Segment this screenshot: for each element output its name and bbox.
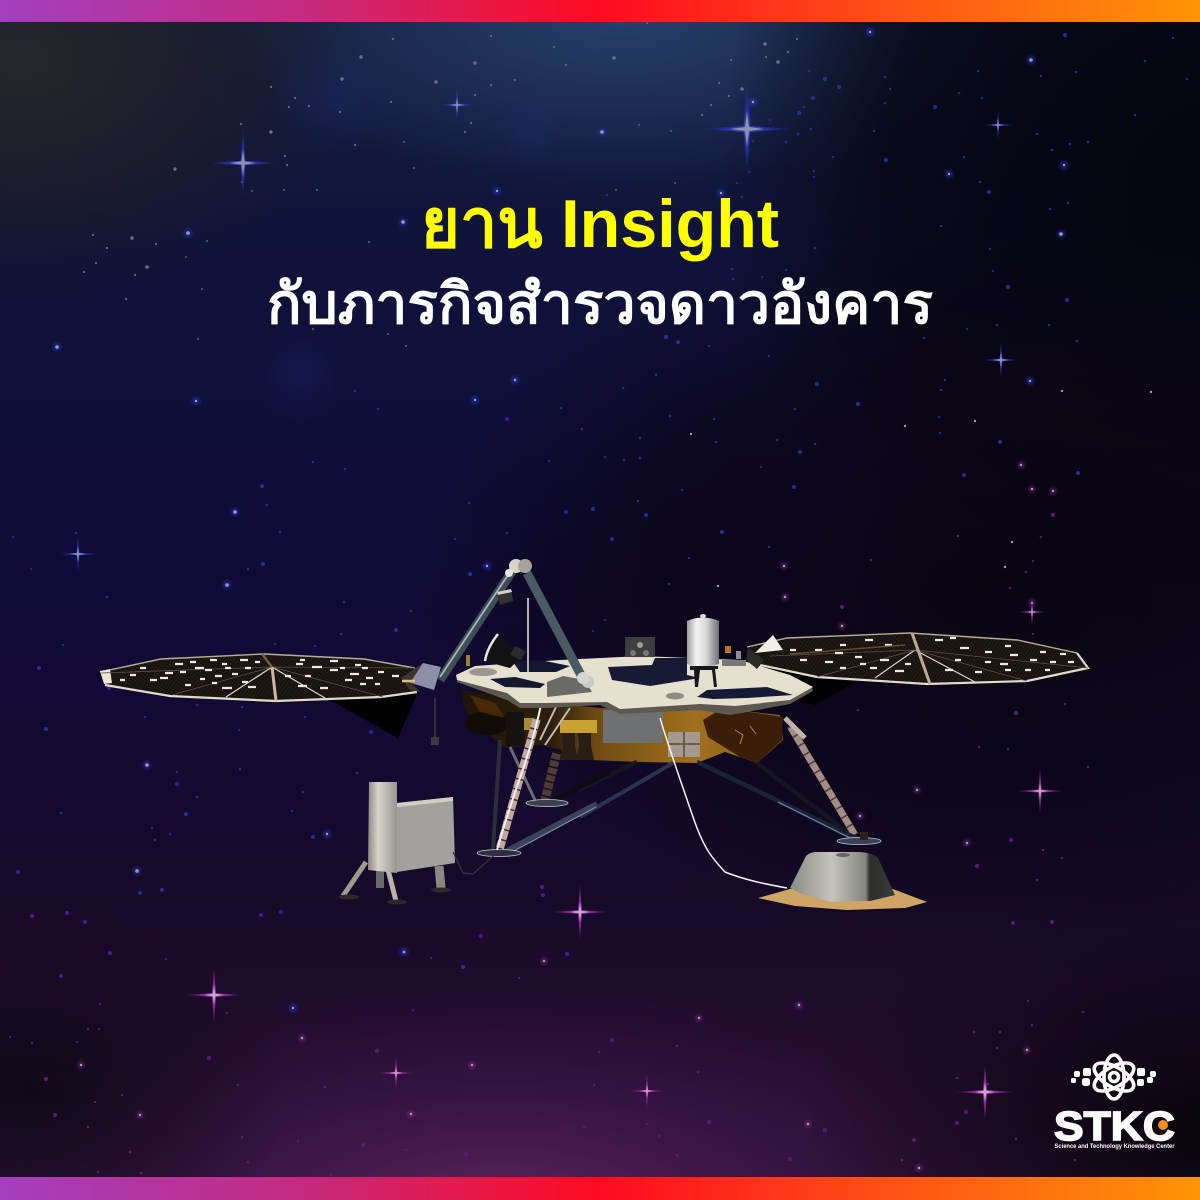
sand base (758, 889, 927, 910)
heat probe (758, 852, 927, 910)
lander body (462, 690, 783, 763)
top gradient bar (0, 0, 1200, 22)
STKC wordmark: STKC (1054, 1103, 1175, 1149)
title (267, 186, 933, 335)
engines (560, 733, 594, 760)
dome (790, 852, 895, 902)
seismometer dish (666, 692, 684, 700)
wind and thermal shield box (339, 782, 500, 904)
grey instrument box (603, 710, 663, 743)
STKC logo (1054, 1055, 1175, 1150)
logo subtitle: Science and Technology Knowledge Center (1054, 1144, 1175, 1150)
bottom gradient bar (0, 1177, 1200, 1200)
title line 1: ยาน Insight (421, 186, 779, 262)
robotic arm (440, 559, 589, 684)
arm gimbal and dangling grapple (401, 663, 441, 745)
silver thruster box (668, 732, 700, 757)
InSight lander illustration (100, 559, 1088, 910)
left solar panel (100, 654, 418, 738)
gold foil panel (560, 720, 597, 733)
grey square instrument (625, 637, 655, 657)
UHF antenna cone left (484, 633, 526, 668)
right landing leg (578, 718, 881, 844)
particle dots (1071, 1068, 1156, 1086)
white tether to heat probe (660, 718, 787, 888)
title line 2: กับภารกิจสำรวจดาวอังคาร (267, 272, 933, 335)
small mast hardware (466, 646, 746, 666)
brown foil blob (703, 708, 783, 763)
right solar panel (747, 633, 1088, 705)
antenna cone right (746, 635, 783, 669)
deck shadow patches (608, 658, 700, 686)
deck (456, 656, 813, 715)
atom icon (1090, 1055, 1138, 1099)
motor block (547, 676, 592, 697)
left landing leg (477, 700, 610, 856)
tall cylinder instrument (687, 614, 719, 687)
orange dot (1158, 1120, 1168, 1130)
